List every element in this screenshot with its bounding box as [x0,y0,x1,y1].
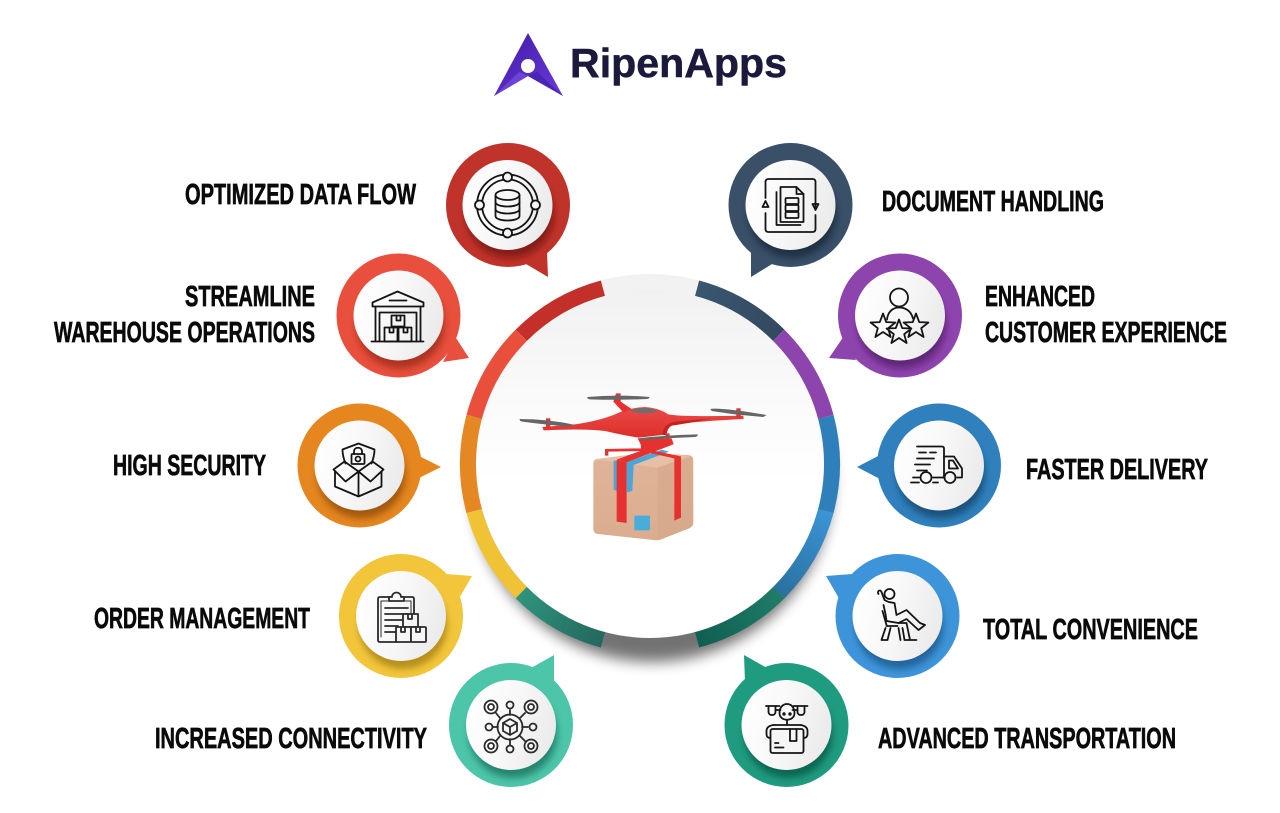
icon: logo arrow mark [494,33,563,96]
parcel [593,442,693,540]
bubble [336,254,469,378]
illustration: delivery drone carrying parcel [520,393,767,540]
panel: streamline warehouse operations [54,254,469,378]
label: ENHANCED [985,281,1095,313]
label: DOCUMENT HANDLING [882,186,1104,218]
drone dome [630,408,658,413]
icon: relaxed person in chair [878,589,925,640]
bubble [728,143,852,277]
bubble [446,143,570,277]
icon: document cycle [762,179,818,232]
panel: faster delivery [857,404,1208,528]
bubble [857,404,1001,528]
label: STREAMLINE [185,281,315,313]
label [54,281,315,349]
bubble [298,404,441,528]
hub inner white disc [476,290,824,638]
panel: high security [113,404,441,528]
icon: warehouse [372,292,424,342]
panel: enhanced customer experience [829,254,1227,378]
label: HIGH SECURITY [113,450,266,482]
label [985,281,1227,349]
hub cast shadow [472,302,832,662]
logo: RipenApps [494,33,787,96]
bubble [724,655,848,787]
drone body shading [662,418,712,435]
icon: network cube [484,700,538,752]
icon: customer with stars [871,288,928,343]
label: ORDER MANAGEMENT [94,603,310,635]
label: WAREHOUSE OPERATIONS [54,317,315,349]
logo wordmark: RipenApps [570,40,787,86]
icon: clipboard with boxes [378,592,426,642]
panel: advanced transportation [724,655,1176,787]
bubble [339,554,472,678]
panel: document handling [728,143,1104,277]
hub colored ring segments [468,288,832,640]
central hub: ring with drone [460,274,840,662]
bubble [449,655,573,787]
drone body and arms [542,407,744,438]
hub top backing disc [498,274,802,380]
label: INCREASED CONNECTIVITY [155,723,427,755]
panel: optimized data flow [185,143,570,277]
drone rotors [520,396,767,440]
drone stem [638,438,674,453]
icon: drone carrying box [766,704,808,753]
panel: order management [94,554,472,678]
bubble [829,254,962,378]
icon: database network [475,172,540,238]
panel: total convenience [826,554,1198,678]
panel: increased connectivity [155,655,573,787]
icon: secure box [334,444,384,496]
drone motors [546,393,741,442]
icon: delivery truck [911,446,962,483]
bubble [826,554,960,678]
label: OPTIMIZED DATA FLOW [185,179,416,211]
